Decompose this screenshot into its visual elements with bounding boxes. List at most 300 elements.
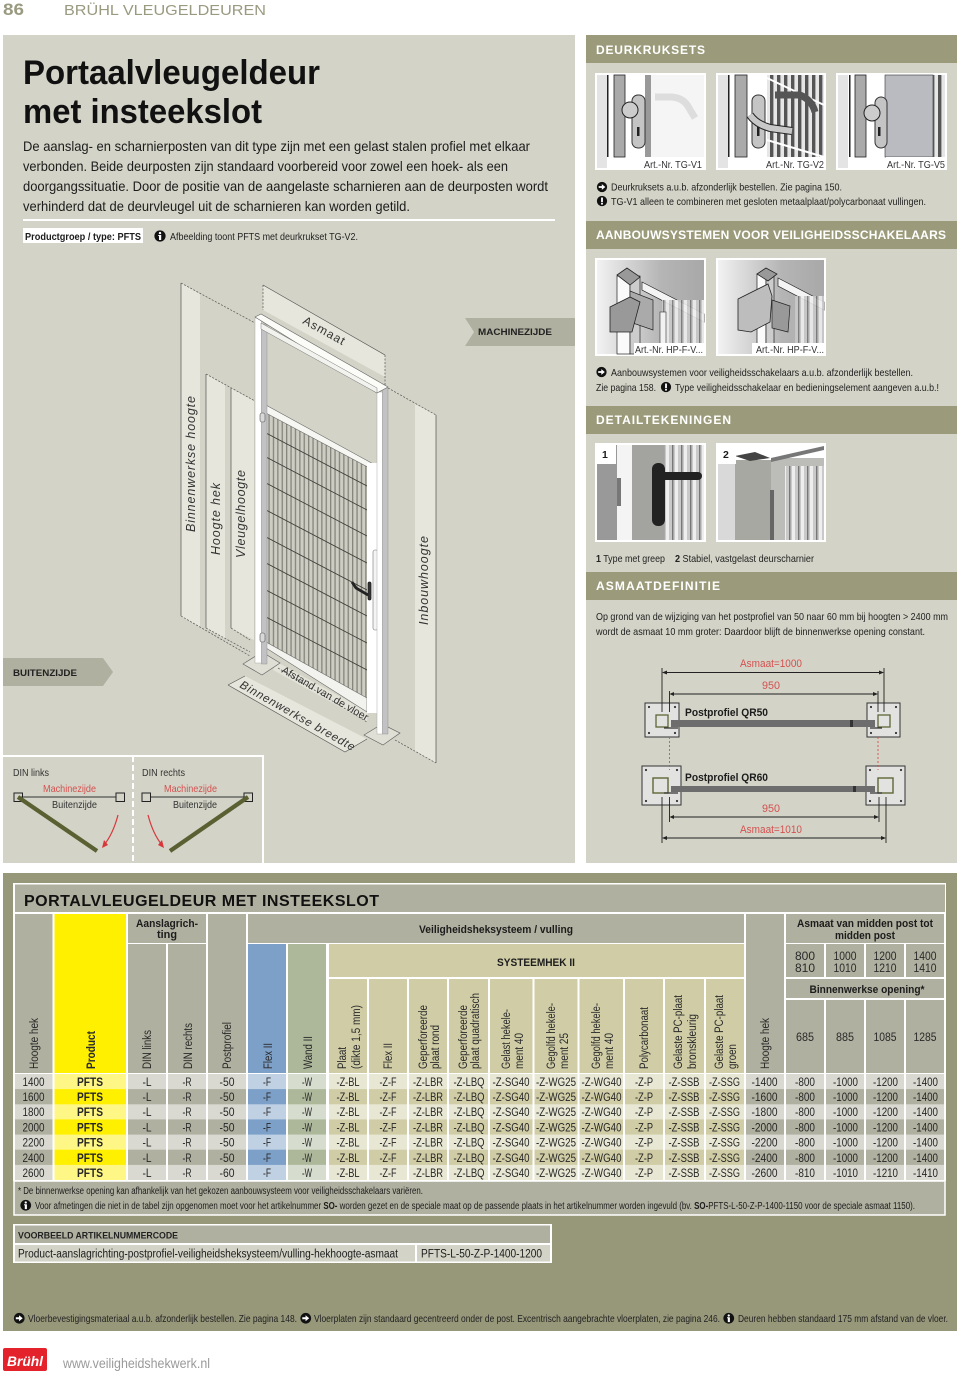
row 2200: -2200 — [752, 1138, 778, 1150]
door handle — [352, 582, 371, 600]
row 2400: -Z-P — [635, 1153, 653, 1165]
table rotated column headings: Gelaste PC-plaat — [714, 994, 726, 1069]
row 2000: -F — [263, 1122, 271, 1134]
table horizontal headings: Binnenwerkse opening* — [810, 984, 925, 996]
intro text: verbonden. Beide deurposten zijn standaard voorbereid voor zowel een hoek- als een — [23, 158, 508, 174]
dimension labels: Binnenwerkse hoogte — [184, 396, 198, 532]
table horizontal headings: 885 — [836, 1030, 854, 1044]
row 2200: -50 — [220, 1138, 234, 1150]
row 1400: -Z-F — [380, 1077, 396, 1089]
dimension labels: Afstand van de vloer — [280, 664, 371, 724]
row 1400: -W — [302, 1077, 312, 1089]
title: Portaalvleugeldeur — [23, 54, 320, 92]
table horizontal headings: SYSTEEMHEK II — [497, 957, 575, 969]
row 1400: -1400 — [752, 1077, 778, 1089]
thumb: TG-V1 — [595, 73, 706, 171]
dimension labels: Binnenwerkse breedte — [238, 679, 357, 754]
intro text: doorgangssituatie. Door de positie van de aangelaste scharnieren aan de deurposten wordt — [23, 178, 548, 194]
DIN rechts diagram: Machinezijde — [164, 783, 217, 795]
table horizontal headings: 1000 — [834, 949, 857, 963]
row 1600: -R — [182, 1092, 192, 1104]
table data rows — [22, 1077, 938, 1180]
row 2000: -1200 — [873, 1122, 898, 1134]
table horizontal headings: 1085 — [874, 1030, 897, 1044]
row 1400: -Z-SSB — [668, 1077, 700, 1089]
row 2600: -Z-P — [635, 1168, 653, 1180]
row 1800: 1800 — [22, 1107, 44, 1119]
QR60 row — [642, 766, 905, 805]
row 2200: -R — [182, 1138, 192, 1150]
row 2000: -Z-BL — [336, 1122, 360, 1134]
heading: deurkruksets: DEURKRUKSETS — [596, 43, 705, 57]
row 1600: -Z-SSB — [668, 1092, 700, 1104]
frame posts and beam — [255, 314, 388, 734]
row 2600: -Z-SG40 — [492, 1168, 530, 1180]
row 2400: -Z-F — [380, 1153, 396, 1165]
table horizontal headings: 1410 — [914, 961, 937, 975]
row 2400: PFTS — [77, 1153, 103, 1165]
row 2200: -Z-SSG — [709, 1138, 740, 1150]
table rotated column headings: Postprofiel — [222, 1022, 234, 1069]
row 2600: -810 — [795, 1168, 815, 1180]
DIN links diagram — [13, 767, 124, 851]
row 1600: PFTS — [77, 1092, 103, 1104]
example article code: PFTS-L-50-Z-P-1400-1200 — [421, 1248, 542, 1260]
row 1600 — [22, 1092, 938, 1104]
row 2000: -Z-WG40 — [582, 1122, 622, 1134]
thumb: TG-V5 — [836, 73, 947, 171]
row 2600: -R — [182, 1168, 192, 1180]
row 2400: -Z-WG40 — [582, 1153, 622, 1165]
row 2600: -F — [263, 1168, 271, 1180]
row 2000: -2000 — [752, 1122, 778, 1134]
row 1800: PFTS — [77, 1107, 103, 1119]
table rotated column headings: plaat rond — [430, 1025, 442, 1069]
row 2600: -1010 — [833, 1168, 858, 1180]
table rotated column headings: Gelaste PC-plaat — [673, 994, 685, 1069]
row 2400: -1200 — [873, 1153, 898, 1165]
logo — [3, 1348, 47, 1371]
row 2000: -1400 — [913, 1122, 938, 1134]
DIN links diagram: DIN links — [13, 767, 49, 779]
thumb: HP-F-V 1: Art.-Nr. HP-F-V... — [635, 344, 703, 356]
table title — [15, 884, 945, 912]
row 2200: 2200 — [22, 1138, 44, 1150]
table rotated column headings: Flex II — [383, 1043, 395, 1069]
row 2400: -1000 — [833, 1153, 858, 1165]
section name: BRÜHL VLEUGELDEUREN — [64, 1, 266, 19]
heading: aanbouwsystemen — [586, 221, 957, 249]
row 2200: -Z-WG40 — [582, 1138, 622, 1150]
row 1800: -Z-WG25 — [536, 1107, 576, 1119]
heading: deurkruksets — [586, 35, 957, 63]
row 1800: -Z-LBQ — [454, 1107, 485, 1119]
row 2400: 2400 — [22, 1153, 44, 1165]
door leaf frame — [264, 404, 378, 713]
row 1400: -1200 — [873, 1077, 898, 1089]
table rotated column headings: Geperforeerde — [418, 1005, 430, 1069]
row 1400: -Z-LBQ — [454, 1077, 485, 1089]
photo captions — [596, 553, 814, 565]
row 2600: -60 — [220, 1168, 234, 1180]
row 2600: -L — [142, 1168, 152, 1180]
DIN rechts diagram: Buitenzijde — [173, 799, 217, 811]
row 1800: -R — [182, 1107, 192, 1119]
row 1400: -F — [263, 1077, 271, 1089]
row 1400: -Z-BL — [336, 1077, 360, 1089]
row 2600: -Z-SSB — [668, 1168, 700, 1180]
thumb: HP-F-V 2: Art.-Nr. HP-F-V... — [756, 344, 824, 356]
row 1800: -1400 — [913, 1107, 938, 1119]
DIN links diagram: Machinezijde — [43, 783, 96, 795]
row 2200: -Z-LBR — [413, 1138, 443, 1150]
row 2200: -Z-SG40 — [492, 1138, 530, 1150]
row 1600: -Z-SG40 — [492, 1092, 530, 1104]
dimension values: 950 — [762, 680, 780, 692]
panel: left product description and door drawing — [3, 35, 575, 863]
hinges — [260, 413, 265, 642]
table rotated column headings: ment 25 — [559, 1033, 571, 1069]
row 1400: 1400 — [22, 1077, 44, 1089]
row 1600: -Z-WG25 — [536, 1092, 576, 1104]
dimension values: Asmaat=1000 — [740, 658, 802, 670]
row 1600: -Z-P — [635, 1092, 653, 1104]
row 2000: -Z-LBQ — [454, 1122, 485, 1134]
asmaat text — [595, 611, 948, 638]
DIN direction box — [3, 756, 263, 863]
table notes: * De binnenwerkse opening kan afhankelijk van het gekozen aanbouwsysteem voor veiligheidsschakelaars variëren. — [18, 1186, 423, 1197]
DIN rechts diagram — [142, 767, 252, 851]
row 1800 — [22, 1107, 938, 1119]
table horizontal headings: 1200 — [874, 949, 897, 963]
table rotated column headings: groen — [727, 1044, 739, 1069]
row 2400 — [22, 1153, 938, 1165]
row 1800: -Z-WG40 — [582, 1107, 622, 1119]
dimension values: 950 — [762, 803, 780, 815]
row 2000: -Z-F — [380, 1122, 396, 1134]
row 2600: -Z-WG40 — [582, 1168, 622, 1180]
row 2400: -L — [142, 1153, 152, 1165]
table horizontal headings: 800 — [795, 949, 815, 963]
dimension labels: Asmaat — [301, 313, 348, 348]
photo 2: door hinge — [716, 443, 826, 542]
table notes — [14, 1181, 945, 1215]
table rotated column headings: Gelast hekele- — [501, 1009, 513, 1069]
row 1600: -Z-BL — [336, 1092, 360, 1104]
row 1800: -Z-SSG — [709, 1107, 740, 1119]
table horizontal headings: 1400 — [914, 949, 937, 963]
thumb: TG-V1: Art.-Nr. TG-V1 — [644, 159, 702, 171]
DIN links diagram: Buitenzijde — [52, 799, 97, 811]
row 2000: 2000 — [22, 1122, 44, 1134]
table horizontal headings: midden post — [835, 930, 895, 942]
table horizontal headings: Veiligheidsheksysteem / vulling — [419, 924, 573, 936]
row 2400: -2400 — [752, 1153, 778, 1165]
row 2400: -F — [263, 1153, 271, 1165]
table horizontal headings: 685 — [796, 1030, 814, 1044]
row 2000: -Z-SG40 — [492, 1122, 530, 1134]
row 1400: -800 — [795, 1077, 815, 1089]
dimension labels — [184, 313, 431, 754]
row 1600: -800 — [795, 1092, 815, 1104]
page number: 86 — [3, 0, 24, 19]
row 2400: -R — [182, 1153, 192, 1165]
row 1400: -Z-P — [635, 1077, 653, 1089]
row 1800: -F — [263, 1107, 271, 1119]
row 1400: -50 — [220, 1077, 234, 1089]
row 2600: -Z-WG25 — [536, 1168, 576, 1180]
title: met insteekslot — [23, 93, 262, 131]
row 1600: -Z-LBR — [413, 1092, 443, 1104]
deurkruksets notes: Deurkruksets a.u.b. afzonderlijk bestellen. Zie pagina 150. — [611, 182, 842, 194]
row 1600: -1200 — [873, 1092, 898, 1104]
deurkruksets notes — [597, 182, 926, 208]
table rotated column headings — [29, 993, 772, 1069]
aanbouwsystemen notes: Zie pagina 158. — [596, 382, 656, 394]
DIN rechts diagram: DIN rechts — [142, 767, 185, 779]
row 2000: -Z-WG25 — [536, 1122, 576, 1134]
row 2600: -1210 — [873, 1168, 898, 1180]
row 1600: -1400 — [913, 1092, 938, 1104]
row 1400: -1400 — [913, 1077, 938, 1089]
heading: detailtekeningen: DETAILTEKENINGEN — [596, 413, 731, 427]
row 2400: -Z-SSB — [668, 1153, 700, 1165]
footer notes: Vloerbevestigingsmateriaal a.u.b. afzonderlijk bestellen. Zie pagina 148. — [28, 1313, 297, 1325]
row 2400: -Z-SSG — [709, 1153, 740, 1165]
tag: machinezijde: MACHINEZIJDE — [478, 327, 552, 338]
row 1400 — [22, 1077, 938, 1089]
tag: machinezijde — [465, 318, 575, 346]
row 1600: -Z-F — [380, 1092, 396, 1104]
dimension lines — [662, 668, 886, 843]
row 1600: -Z-WG40 — [582, 1092, 622, 1104]
row 2000: -1000 — [833, 1122, 858, 1134]
photo 1: door handle — [595, 443, 706, 542]
row 2000: -W — [302, 1122, 312, 1134]
tag: buitenzijde: BUITENZIJDE — [13, 668, 77, 679]
row 1400: -Z-LBR — [413, 1077, 443, 1089]
row 2600: -2600 — [752, 1168, 778, 1180]
row 2200 — [22, 1138, 938, 1150]
page header — [3, 0, 266, 19]
heading: detailtekeningen — [586, 406, 957, 434]
row 2600: -Z-LBR — [413, 1168, 443, 1180]
example article code — [13, 1224, 552, 1263]
photo 2: door hinge: 2 — [723, 449, 729, 461]
table rotated column headings: Product — [86, 1031, 98, 1069]
table rotated column headings: (dikte 1,5 mm) — [351, 1005, 363, 1069]
row 2400: -Z-LBR — [413, 1153, 443, 1165]
row 1400: -1000 — [833, 1077, 858, 1089]
example article code: VOORBEELD ARTIKELNUMMERCODE — [18, 1230, 178, 1242]
row 2200: -L — [142, 1138, 152, 1150]
row 2600: -Z-F — [380, 1168, 396, 1180]
table data backgrounds — [15, 1074, 945, 1180]
row 1400: -R — [182, 1077, 192, 1089]
row 1400: -Z-WG25 — [536, 1077, 576, 1089]
QR60 row: Postprofiel QR60 — [685, 772, 768, 784]
table horizontal headings: Asmaat van midden post tot — [797, 918, 933, 930]
table rotated column headings: ment 40 — [514, 1033, 526, 1069]
table rotated column headings: Wand II — [303, 1036, 315, 1069]
aanbouwsystemen notes — [596, 367, 939, 394]
row 1800: -Z-SG40 — [492, 1107, 530, 1119]
table horizontal headings: Aanslagrich- — [136, 918, 198, 930]
row 1800: -Z-F — [380, 1107, 396, 1119]
thumb: TG-V2 — [716, 73, 826, 171]
row 1800: -1800 — [752, 1107, 778, 1119]
row 2600: -Z-LBQ — [454, 1168, 485, 1180]
row 1600: -1000 — [833, 1092, 858, 1104]
asmaat diagram — [642, 658, 905, 843]
icon: info — [154, 230, 166, 242]
row 2000: -Z-P — [635, 1122, 653, 1134]
row 1800: -50 — [220, 1107, 234, 1119]
row 1600: -W — [302, 1092, 312, 1104]
table rotated column headings: Plaat — [337, 1046, 349, 1069]
row 1800: -Z-LBR — [413, 1107, 443, 1119]
row 2200: PFTS — [77, 1138, 103, 1150]
table header cells — [15, 914, 944, 1073]
row 1800: -Z-P — [635, 1107, 653, 1119]
row 2200: -F — [263, 1138, 271, 1150]
table rotated column headings: plaat quadratisch — [470, 993, 482, 1069]
aanbouwsystemen notes: Aanbouwsystemen voor veiligheidsschakelaars a.u.b. afzonderlijk bestellen. — [611, 367, 913, 379]
row 1800: -Z-SSB — [668, 1107, 700, 1119]
row 1600: -L — [142, 1092, 152, 1104]
row 2400: -W — [302, 1153, 312, 1165]
dimension labels: Inbouwhoogte — [417, 536, 431, 625]
thumb: HP-F-V 2 — [716, 258, 826, 356]
dimension values: Asmaat=1010 — [740, 824, 802, 836]
row 1600: -50 — [220, 1092, 234, 1104]
row 1800: -Z-BL — [336, 1107, 360, 1119]
row 1800: -1200 — [873, 1107, 898, 1119]
photo captions: 1 Type met greep — [596, 553, 665, 565]
example article code: Product-aanslagrichting-postprofiel-veiligheidsheksysteem/vulling-hekhoogte-asmaat — [18, 1248, 399, 1260]
tag: buitenzijde — [3, 658, 113, 686]
row 1600: -F — [263, 1092, 271, 1104]
dimension strips — [181, 283, 436, 763]
row 2400: -1400 — [913, 1153, 938, 1165]
intro text: De aanslag- en scharnierposten van dit type zijn met een gelast stalen profiel met elkaar — [23, 138, 530, 154]
row 2200: -Z-LBQ — [454, 1138, 485, 1150]
row 2200: -W — [302, 1138, 312, 1150]
thumb: HP-F-V 1 — [595, 258, 706, 356]
table title: PORTALVLEUGELDEUR MET INSTEEKSLOT — [24, 893, 379, 910]
table rotated column headings: DIN links — [142, 1030, 154, 1069]
row 2000: -800 — [795, 1122, 815, 1134]
row 1600: -Z-LBQ — [454, 1092, 485, 1104]
row 2200: -Z-P — [635, 1138, 653, 1150]
row 1600: -Z-SSG — [709, 1092, 740, 1104]
row 2400: -Z-WG25 — [536, 1153, 576, 1165]
row 2200: -1400 — [913, 1138, 938, 1150]
row 2200: -Z-F — [380, 1138, 396, 1150]
intro text: verhinderd dat de deurvleugel uit de scharnieren kan worden getild. — [23, 198, 410, 214]
row 2400: -Z-LBQ — [454, 1153, 485, 1165]
row 1400: -Z-SSG — [709, 1077, 740, 1089]
row 1800: -W — [302, 1107, 312, 1119]
row 2000: -Z-SSB — [668, 1122, 700, 1134]
row 2200: -800 — [795, 1138, 815, 1150]
row 2200: -Z-SSB — [668, 1138, 700, 1150]
table rotated column headings: Gegolfd hekele- — [546, 1003, 558, 1069]
table rotated column headings: Flex II — [263, 1043, 275, 1069]
heading: asmaatdefinitie: ASMAATDEFINITIE — [596, 579, 720, 593]
door mesh — [266, 405, 368, 705]
row 1400: PFTS — [77, 1077, 103, 1089]
table rotated column headings: DIN rechts — [183, 1023, 195, 1069]
row 1400: -L — [142, 1077, 152, 1089]
row 2400: -Z-SG40 — [492, 1153, 530, 1165]
panel: product table — [3, 873, 957, 1331]
row 2000: -R — [182, 1122, 192, 1134]
heading: asmaatdefinitie — [586, 572, 957, 600]
table horizontal headings: ting — [157, 929, 177, 941]
row 2600 — [22, 1168, 938, 1180]
table horizontal headings: 1210 — [874, 961, 897, 975]
table rotated column headings: Hoogte hek — [29, 1018, 41, 1069]
table horizontal headings: 1285 — [914, 1030, 937, 1044]
thumb: TG-V5: Art.-Nr. TG-V5 — [887, 159, 945, 171]
row 2600: PFTS — [77, 1168, 103, 1180]
logo: Brühl — [7, 1353, 44, 1369]
QR50 row — [645, 703, 900, 737]
row 1600: 1600 — [22, 1092, 44, 1104]
row 1800: -800 — [795, 1107, 815, 1119]
arrowheads — [662, 670, 886, 840]
photo 1: door handle: 1 — [602, 449, 608, 461]
row 1400: -Z-WG40 — [582, 1077, 622, 1089]
row 2000: -L — [142, 1122, 152, 1134]
footer notes — [14, 1313, 948, 1325]
dimension labels: Hoogte hek — [209, 482, 223, 555]
table rotated column headings: Gegolfd hekele- — [591, 1003, 603, 1069]
row 1600: -1600 — [752, 1092, 778, 1104]
row 2600: 2600 — [22, 1168, 44, 1180]
QR50 row: Postprofiel QR50 — [685, 707, 768, 719]
panel: right column — [586, 35, 957, 863]
row 2000: -50 — [220, 1122, 234, 1134]
image note: Afbeelding toont PFTS met deurkrukset TG-V2. — [170, 231, 358, 243]
row 2400: -800 — [795, 1153, 815, 1165]
row 2000: -Z-SSG — [709, 1122, 740, 1134]
table rotated column headings: Geperforeerde — [458, 1005, 470, 1069]
row 2400: -50 — [220, 1153, 234, 1165]
row 2200: -1000 — [833, 1138, 858, 1150]
table notes: Voor afmetingen die niet in de tabel zijn opgenomen moet voor het artikelnummer SO- worden gezet en de speciale maat op de passende plaats in het artikelnummer worden ingevuld (bv. SO-PFTS-L-50-Z-P-1400-1150 voor de speciale asmaat 1150). — [35, 1201, 915, 1212]
photo captions: 2 Stabiel, vastgelast deurscharnier — [675, 553, 814, 565]
row 2200: -Z-WG25 — [536, 1138, 576, 1150]
row 2000 — [22, 1122, 938, 1134]
table rotated column headings: bronskleurig — [687, 1014, 699, 1069]
dimension values — [740, 658, 802, 836]
dimension labels: Vleugelhoogte — [234, 470, 248, 558]
row 2200: -1200 — [873, 1138, 898, 1150]
row 2400: -Z-BL — [336, 1153, 360, 1165]
table horizontal headings — [136, 918, 937, 1044]
row 2000: -Z-LBR — [413, 1122, 443, 1134]
door drawing — [181, 283, 436, 763]
heading: aanbouwsystemen: AANBOUWSYSTEMEN VOOR VEILIGHEIDSSCHAKELAARS — [596, 228, 946, 242]
table rotated column headings: Polycarbonaat — [639, 1006, 651, 1069]
table horizontal headings: 810 — [795, 961, 815, 975]
base plates — [243, 652, 400, 745]
website url: www.veiligheidshekwerk.nl — [62, 1356, 210, 1371]
product group tag: Productgroep / type: PFTS — [25, 231, 141, 243]
table horizontal headings: 1010 — [834, 961, 857, 975]
